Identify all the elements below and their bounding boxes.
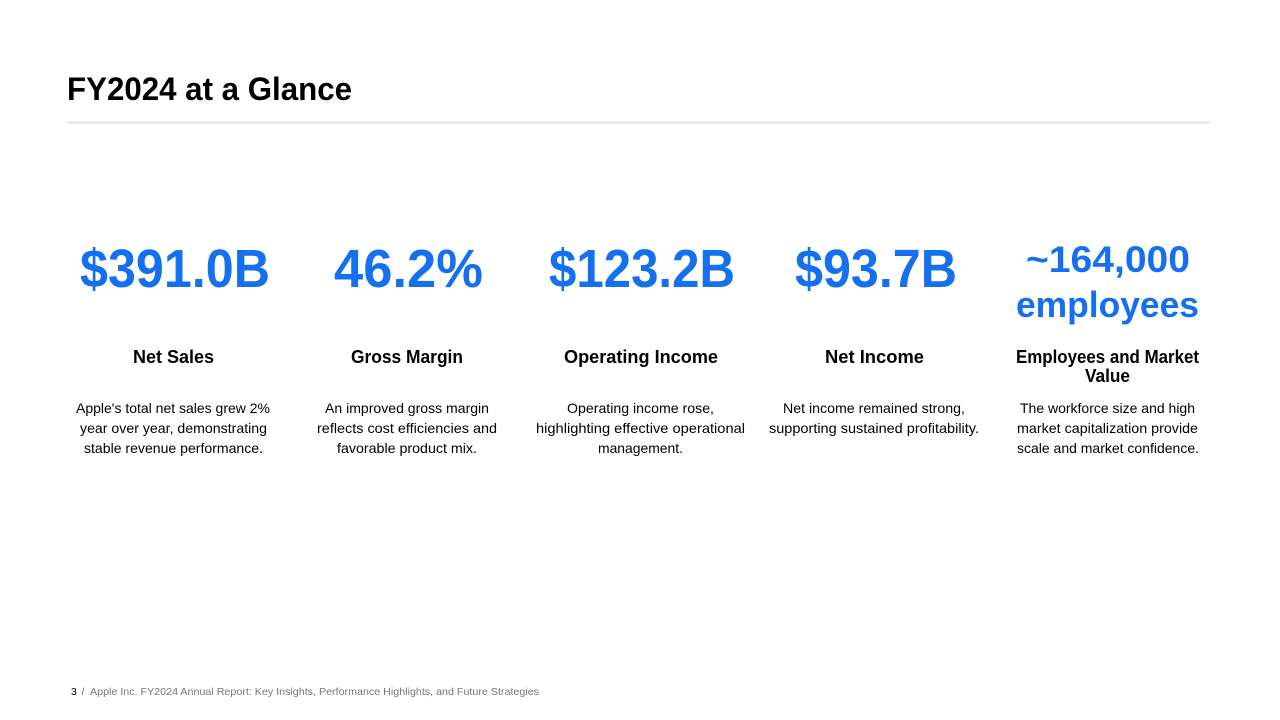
heading: employees and market value: Value bbox=[1085, 366, 1130, 386]
text block: operating income description bbox=[536, 400, 745, 456]
text block: net sales description: Apple's total net sales grew 2% bbox=[76, 400, 270, 416]
metric: employees value: ~164,000 bbox=[1026, 239, 1190, 280]
metric: employees value: employees bbox=[1016, 284, 1199, 325]
footer text: Apple Inc. FY2024 Annual Report: Key Insights, Performance Highlights, and Future Strategies bbox=[90, 686, 539, 698]
metric: gross margin value: 46.2% bbox=[334, 239, 483, 299]
text block: operating income description: management. bbox=[598, 440, 683, 456]
text block: net sales description: year over year, demonstrating bbox=[80, 420, 267, 436]
title divider bbox=[67, 121, 1211, 124]
panel: employees and market value bbox=[1016, 239, 1199, 456]
footer separator: / bbox=[82, 686, 84, 698]
heading: employees and market value bbox=[1016, 347, 1199, 386]
text block: gross margin description: An improved gross margin bbox=[325, 400, 489, 416]
text block: gross margin description bbox=[317, 400, 497, 456]
text block: employees description: market capitalization provide bbox=[1017, 420, 1198, 436]
text block: net income description bbox=[769, 400, 979, 436]
text block: gross margin description: favorable product mix. bbox=[337, 440, 477, 456]
metric: employees value bbox=[1016, 239, 1199, 325]
heading: net sales: Net Sales bbox=[133, 347, 214, 367]
panel: net sales bbox=[76, 239, 270, 456]
panel: net income bbox=[769, 239, 979, 436]
text block: employees description bbox=[1017, 400, 1199, 456]
metric: operating income value: $123.2B bbox=[549, 239, 735, 299]
text block: net sales description: stable revenue performance. bbox=[84, 440, 263, 456]
text block: gross margin description: reflects cost efficiencies and bbox=[317, 420, 497, 436]
text block: net income description: supporting sustained profitability. bbox=[769, 420, 979, 436]
panel: gross margin bbox=[317, 239, 497, 456]
title: FY2024 at a Glance bbox=[67, 71, 352, 107]
heading: gross margin: Gross Margin bbox=[351, 347, 463, 367]
text block: employees description: The workforce size and high bbox=[1020, 400, 1195, 416]
text block: employees description: scale and market confidence. bbox=[1017, 440, 1199, 456]
heading: employees and market value: Employees and Market bbox=[1016, 347, 1199, 367]
page number: 3 bbox=[71, 686, 77, 698]
metric: net sales value: $391.0B bbox=[80, 239, 270, 299]
heading: operating income: Operating Income bbox=[564, 347, 718, 367]
heading: net income: Net Income bbox=[825, 347, 924, 367]
panel: operating income bbox=[536, 239, 745, 456]
text block: net income description: Net income remained strong, bbox=[783, 400, 965, 416]
footer bbox=[71, 686, 539, 698]
text block: operating income description: Operating income rose, bbox=[567, 400, 714, 416]
text block: operating income description: highlighting effective operational bbox=[536, 420, 745, 436]
text block: net sales description bbox=[76, 400, 270, 456]
metric: net income value: $93.7B bbox=[795, 239, 957, 299]
